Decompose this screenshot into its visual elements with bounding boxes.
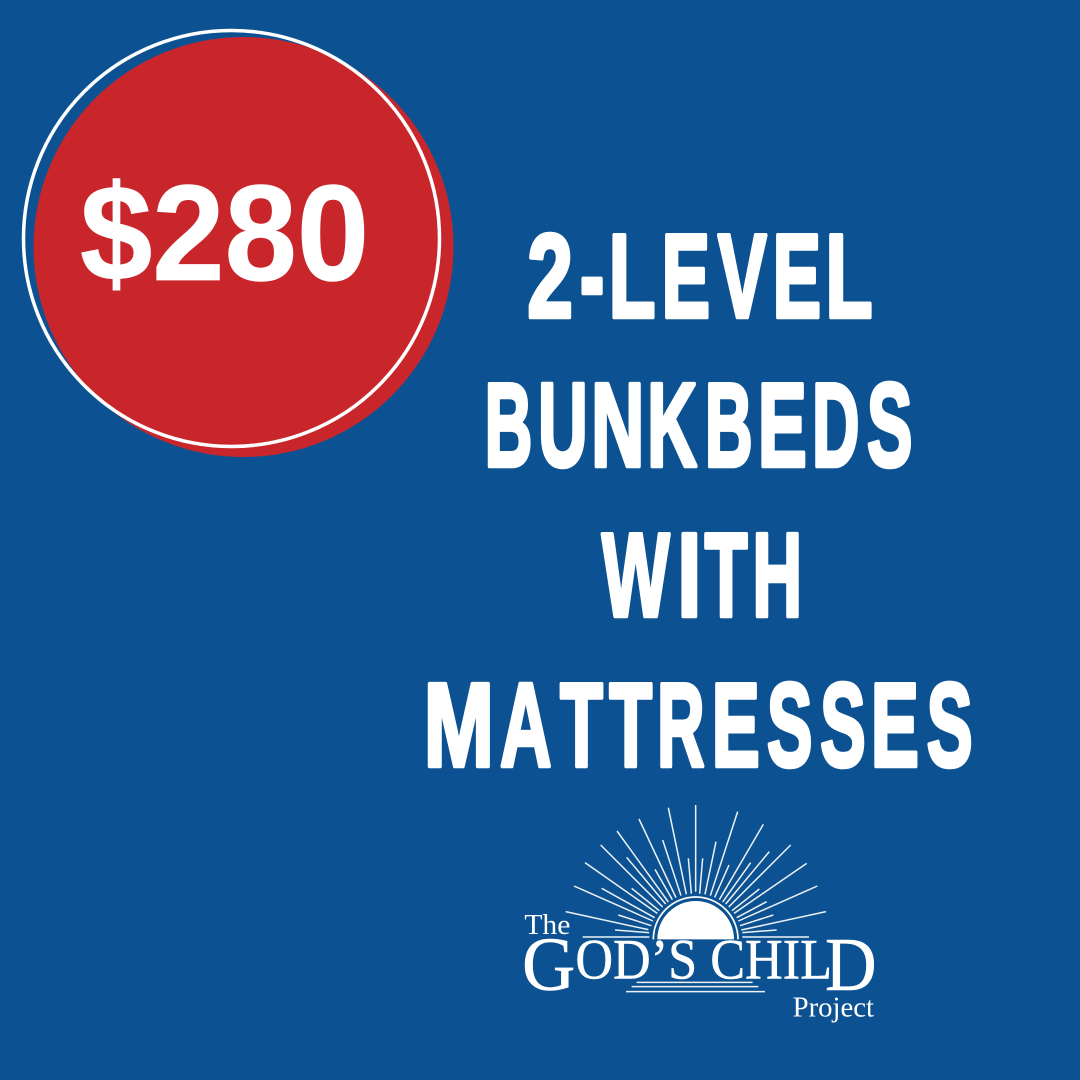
heading: S (867, 360, 912, 492)
heading: U (538, 360, 588, 492)
logo wordmark (522, 910, 877, 1024)
heading: E (662, 211, 710, 343)
price: $280 (80, 157, 369, 310)
heading: 2 (527, 211, 573, 343)
heading: N (591, 360, 644, 492)
logo: The God's Child Project (522, 805, 877, 1024)
heading: E (871, 660, 919, 792)
logo wordmark: OD’S CHIL (575, 928, 832, 991)
heading: - (580, 211, 604, 343)
heading: T (560, 660, 603, 792)
heading: S (820, 660, 866, 792)
white ring (24, 30, 440, 446)
heading: S (927, 660, 972, 792)
icon: sun rays (566, 805, 826, 992)
heading: L (609, 211, 656, 343)
heading: R (657, 660, 704, 792)
heading: A (500, 660, 551, 792)
heading: T (609, 660, 652, 792)
heading: T (705, 510, 747, 642)
logo wordmark: Project (793, 993, 874, 1024)
logo wordmark: D (825, 922, 877, 1007)
heading: K (647, 360, 697, 492)
heading: L (826, 211, 872, 343)
heading: E (773, 211, 821, 343)
heading: B (485, 360, 532, 492)
heading: H (752, 510, 802, 642)
heading: E (758, 360, 807, 492)
red circle (34, 37, 454, 457)
logo wordmark: The (524, 910, 570, 941)
heading: M (424, 660, 494, 792)
heading: V (718, 211, 767, 343)
icon: sun (653, 897, 738, 939)
heading: I (677, 510, 701, 642)
price badge (24, 30, 454, 457)
heading: S (767, 660, 812, 792)
heading: B (705, 360, 753, 492)
heading: W (602, 510, 670, 642)
heading: E (712, 660, 760, 792)
heading (424, 211, 972, 792)
logo wordmark: G (522, 922, 575, 1007)
heading: D (812, 360, 859, 492)
